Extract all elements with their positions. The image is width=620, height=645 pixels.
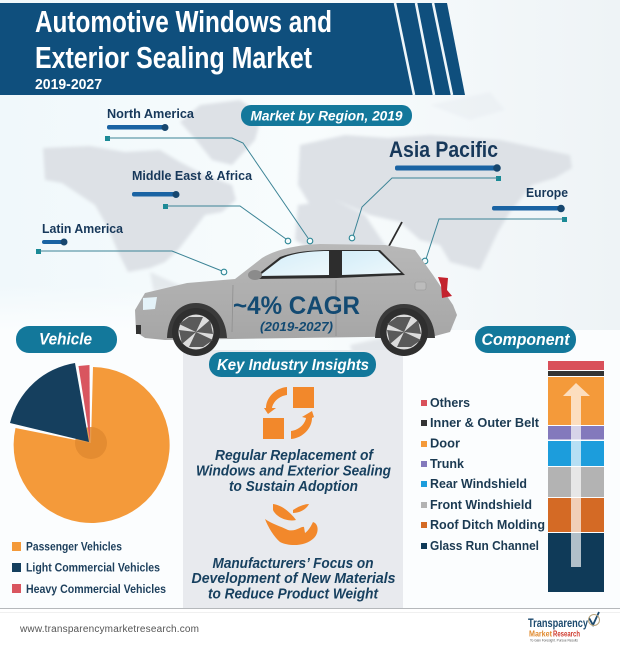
text: replacement insight: Windows and Exterior Sealing — [196, 462, 391, 480]
title: Automotive Windows and — [35, 4, 332, 39]
CAGR text: (2019-2027) — [260, 319, 333, 334]
rear window — [342, 251, 401, 275]
icon: feather — [265, 504, 318, 545]
CAGR text — [233, 292, 360, 334]
text: materials insight: to Reduce Product Weight — [208, 586, 379, 602]
arrow — [563, 383, 590, 567]
legend: component: Others — [430, 395, 470, 410]
rear wheel — [380, 308, 428, 356]
legend: component: Door — [430, 436, 460, 450]
car — [135, 222, 457, 356]
vehicle pill: Vehicle — [39, 330, 92, 348]
market by region pill — [241, 105, 412, 126]
front window — [259, 251, 329, 276]
region: North America — [105, 106, 313, 244]
legend: component: Front Windshield — [430, 497, 532, 512]
headlight — [143, 297, 157, 310]
market by region pill: Market by Region, 2019 — [250, 108, 403, 124]
mirror — [248, 270, 262, 280]
car body — [135, 244, 457, 340]
logo: Transparency — [528, 616, 588, 630]
title — [35, 4, 332, 93]
vehicle pill — [16, 326, 117, 353]
legend: vehicle: Light Commercial Vehicles — [26, 560, 160, 574]
bumper vent — [136, 325, 141, 334]
legend: component: Trunk — [430, 456, 465, 471]
icon: replacement arrows — [263, 387, 314, 439]
text: replacement insight — [196, 447, 391, 495]
world map — [43, 92, 572, 380]
region: Europe: Europe — [526, 185, 568, 200]
text: materials insight: Manufacturers’ Focus on — [212, 555, 374, 572]
region: Asia Pacific: Asia Pacific — [389, 137, 498, 162]
region: Asia Pacific — [349, 137, 501, 241]
footer — [0, 608, 620, 642]
text: materials insight: Development of New Materials — [192, 570, 396, 587]
stacked bar: component — [548, 361, 604, 592]
region: Europe — [422, 185, 568, 264]
region: North America: North America — [107, 106, 195, 121]
legend: component: Glass Run Channel — [430, 538, 539, 553]
component pill — [475, 326, 576, 353]
legend: component — [421, 395, 545, 553]
legend: vehicle: Passenger Vehicles — [26, 540, 122, 554]
region: Middle East & Africa — [132, 168, 291, 244]
legend: vehicle — [12, 540, 166, 596]
pie chart: vehicle — [10, 363, 170, 523]
fuel cap — [415, 282, 426, 290]
front wheel — [172, 308, 220, 356]
text: materials insight — [192, 555, 396, 602]
region: Latin America: Latin America — [42, 221, 124, 236]
key industry insights pill — [209, 352, 376, 377]
logo: Market — [529, 628, 552, 638]
tail light — [438, 277, 452, 298]
logo: Research — [553, 628, 580, 638]
CAGR text: ~4% CAGR — [233, 292, 360, 320]
key industry insights pill: Key Industry Insights — [217, 357, 369, 374]
region: Middle East & Africa: Middle East & Africa — [132, 168, 253, 183]
title: Exterior Sealing Market — [35, 40, 312, 75]
legend: vehicle: Heavy Commercial Vehicles — [26, 582, 166, 596]
door lines — [232, 280, 336, 336]
header banner — [0, 3, 465, 95]
logo — [528, 612, 600, 642]
panel: key industry insights — [183, 350, 403, 608]
component pill: Component — [482, 330, 571, 349]
legend: component: Rear Windshield — [430, 476, 527, 491]
legend: component: Inner & Outer Belt — [430, 415, 540, 430]
text: replacement insight: to Sustain Adoption — [229, 478, 358, 495]
website url: www.transparencymarketresearch.com — [19, 624, 199, 635]
region: Latin America — [36, 221, 227, 275]
title: 2019-2027 — [35, 76, 102, 93]
logo: To Gain Foresight. Pursue Results — [530, 638, 578, 642]
windows frame — [252, 250, 405, 279]
wheel arches — [167, 303, 435, 338]
text: replacement insight: Regular Replacement of — [215, 447, 375, 464]
antenna — [389, 222, 402, 246]
legend: component: Roof Ditch Molding — [430, 517, 545, 532]
